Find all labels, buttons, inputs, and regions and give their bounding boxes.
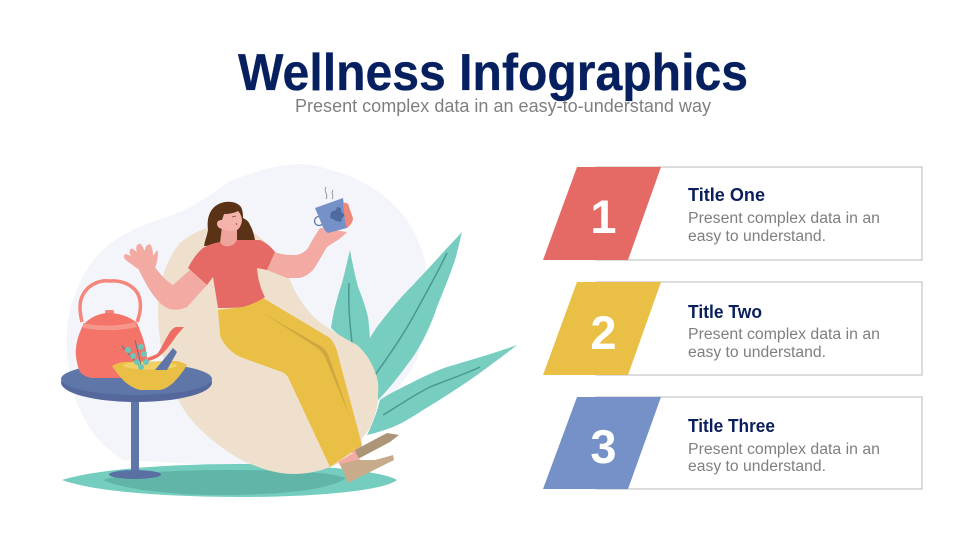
herb stems xyxy=(122,340,142,369)
upper shoe xyxy=(355,433,399,459)
leaves xyxy=(331,232,517,435)
side table and tea set xyxy=(61,281,212,479)
ground ellipse xyxy=(62,464,397,497)
mug handle xyxy=(314,216,324,226)
card 1 body: easy to understand. xyxy=(688,228,826,245)
leaf veins xyxy=(349,253,480,415)
card 1 xyxy=(543,167,922,260)
fingers xyxy=(343,203,353,228)
title: Wellness Infographics xyxy=(238,43,748,101)
table foot xyxy=(109,470,161,479)
kettle xyxy=(76,281,184,378)
card 2 title: Title Two xyxy=(688,302,762,322)
inner ground ellipse xyxy=(103,470,346,495)
left hand xyxy=(124,244,158,269)
number 2: 2 xyxy=(590,306,617,359)
card 3 body: easy to understand. xyxy=(688,458,826,475)
pestle xyxy=(155,348,177,370)
card 1 number tab xyxy=(543,167,661,260)
left arm xyxy=(138,267,207,310)
subtitle: Present complex data in an easy-to-understand way xyxy=(295,96,711,116)
shirt xyxy=(188,240,275,308)
kettle body xyxy=(76,313,147,378)
herb leaf cluster xyxy=(125,344,149,370)
trouser fold xyxy=(263,313,350,417)
card 2 number tab xyxy=(543,282,661,375)
eye and mouth marks xyxy=(232,216,237,225)
number 1: 1 xyxy=(590,190,617,243)
table leg xyxy=(131,398,139,472)
herb xyxy=(122,340,149,370)
table edge xyxy=(61,363,212,402)
card 3 body: Present complex data in an xyxy=(688,441,880,458)
leaf front xyxy=(367,345,517,435)
table top xyxy=(61,363,212,395)
mortar and pestle xyxy=(112,340,187,390)
background blob xyxy=(67,164,426,470)
card 3 frame xyxy=(596,397,922,489)
sock upper xyxy=(350,438,362,455)
trousers xyxy=(218,298,362,467)
card 2 body: Present complex data in an xyxy=(688,326,880,343)
beige blob xyxy=(158,228,378,474)
steam xyxy=(325,187,333,199)
leaf back xyxy=(331,250,370,356)
card 3 number tab xyxy=(543,397,661,489)
face xyxy=(217,211,242,231)
neck xyxy=(220,226,237,247)
card 1 title: Title One xyxy=(688,185,765,205)
lower shoe xyxy=(340,455,394,483)
number 3: 3 xyxy=(590,420,617,473)
bowl xyxy=(112,361,187,390)
card 3 title: Title Three xyxy=(688,416,775,436)
leaf middle xyxy=(363,232,462,400)
kettle band xyxy=(83,322,137,330)
mug body xyxy=(315,198,347,233)
sock lower xyxy=(338,452,360,470)
mug with steam xyxy=(314,187,353,233)
right arm xyxy=(267,228,347,278)
card 3 xyxy=(543,397,922,489)
hair xyxy=(204,202,255,246)
card 2 frame xyxy=(596,282,922,375)
kettle knob xyxy=(105,310,114,316)
mug puzzle decal xyxy=(330,207,345,222)
card 2 xyxy=(543,282,922,375)
ground shadow xyxy=(62,464,397,497)
kettle handle xyxy=(80,281,141,322)
card 2 body: easy to understand. xyxy=(688,344,826,361)
bowl inner xyxy=(123,362,177,370)
kettle spout xyxy=(147,327,184,361)
card 1 frame xyxy=(596,167,922,260)
woman figure xyxy=(124,187,399,483)
left arm and hand xyxy=(124,244,207,310)
illustration: woman with tea xyxy=(61,164,517,497)
card 1 body: Present complex data in an xyxy=(688,210,880,227)
